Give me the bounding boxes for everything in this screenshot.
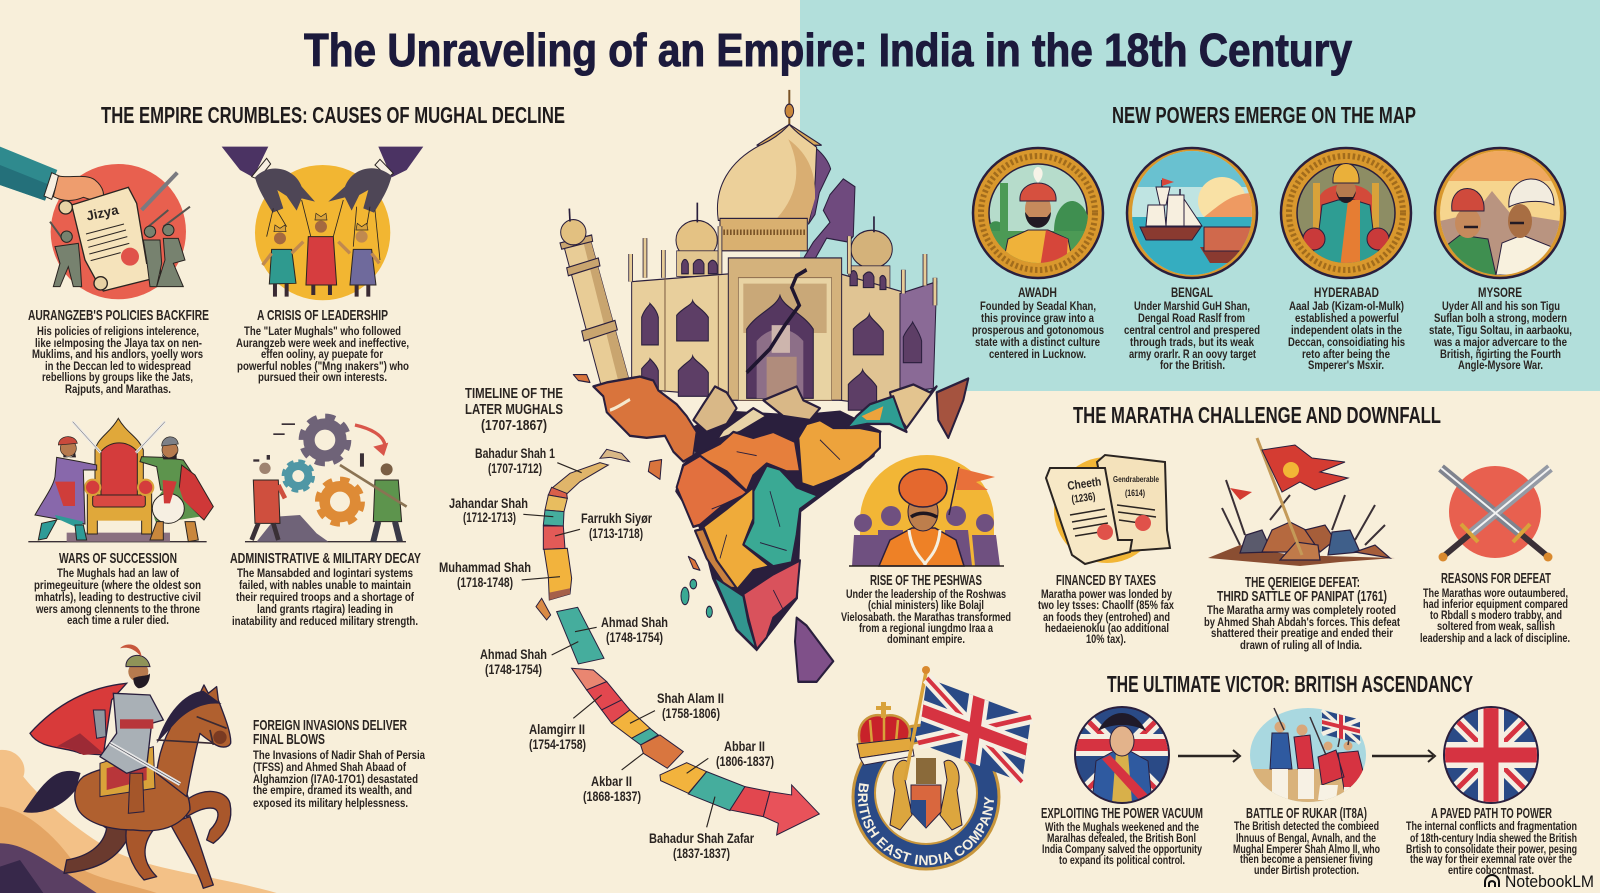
icon: puppeteer hands [222,147,423,300]
text: rise of the Peshwas [841,572,1011,646]
text: Awadh: centered in Lucknow. [989,347,1086,361]
timeline label: Shah Alam II: Shah Alam II [657,690,724,706]
text: financed by taxes: 10% tax). [1086,632,1126,646]
timeline label: Akbar II lower: (1868-1837) [583,788,641,804]
text: Mysore: was a major advercare to the [1433,335,1567,349]
text: Battle of Buxar: The British detected the combieed [1234,819,1379,833]
text: exploiting the power vacuum: India Company salved the opportunity [1042,842,1202,856]
body text: land grants rtagira) leading in [257,602,393,616]
text: Awadh: state with a distinct culture [975,335,1100,349]
icon: British officer [1075,707,1169,803]
body text: primegeuiture (where the oldest son [34,578,201,592]
icon: Union Jack flag [918,678,1031,782]
text: Awadh: AWADH [1018,284,1057,300]
timeline label: Ahmad Shah left: Ahmad Shah [480,646,547,662]
text: Hyderabad: HYDERABAD [1314,284,1379,300]
text: Hyderabad: independent olats in the [1291,323,1402,337]
text: Awadh: prosperous and gotonomous [972,323,1104,337]
text: rise of the Peshwas: Vielosabath. the Marathas transformed [841,610,1011,624]
timeline label: Ahmad Shah left: (1748-1754) [485,661,542,677]
timeline heading: TIMELINE OF THE [465,385,563,402]
subheading: AURANGZEB'S POLICIES BACKFIRE [28,307,209,324]
body text: The Mansabded and Iogintari systems [237,566,413,580]
body text [34,566,201,627]
subheading: FOREIGN INVASIONS DELIVER [253,717,407,734]
text: Bengal: for the British. [1160,358,1225,372]
text: Mysore [1429,284,1572,372]
icon: Union Jack circle [1444,707,1538,803]
body text: like ıeImposing the Jlaya tax on nen- [35,336,202,350]
timeline label: Ahmad Shah right: (1748-1754) [606,629,663,645]
text: Hyderabad: Deccan, consoidiating his [1288,335,1405,349]
text: rise of the Peshwas: (chial ministers) like Bolajl [868,598,984,612]
timeline label: Jahandar Shah: Jahandar Shah [449,495,528,511]
illustration: crumbling palace [560,90,937,410]
timeline label: Farrukh Siyar [581,510,652,541]
icon: broken gears and soldiers [245,417,407,542]
body text [32,324,203,396]
timeline label: Bahadur Shah Zafar [649,830,754,861]
text: Bengal: through trads, but its weak [1130,335,1254,349]
body text: effen ooliny, ay puepate for [261,347,383,361]
text: Mysore: Uyder All and his son Tigu [1442,299,1560,313]
icon: Awadh medallion [973,148,1103,278]
body text: their required troops and a shortage of [236,590,415,604]
body text: failed, with nables unable to maintain [239,578,411,592]
text: a paved path to power [1406,805,1577,877]
text: Battle of Buxar: Mughal Emperer Shah Almo II, who [1233,842,1380,856]
body text [236,324,409,384]
timeline heading: (1707-1867) [481,417,547,434]
text: Bengal: Dengal Road Raslf from [1138,311,1245,325]
text: third battle of Panipat: shattered their preatige and ended their [1211,626,1393,640]
icon: tax scrolls: (1236) [1071,491,1096,506]
text: a paved path to power: entire cobccntmast. [1448,863,1534,877]
timeline label: Akbar II upper: (1806-1837) [716,753,774,769]
timeline label: Muhammad Shah: (1718-1748) [457,574,513,590]
text: financed by taxes: Maratha power was londed by [1041,587,1172,601]
body text: in the Deccan led to widespread [45,359,191,373]
text: Mysore: Suflan bolh a strong, modern [1434,311,1567,325]
body text: wers among clennents to the throne [35,602,200,616]
text: financed by taxes: two ley tsses: Chaollf (85% fax [1038,598,1174,612]
subheading [253,717,407,748]
body text: each time a ruler died. [67,613,169,627]
text: third battle of Panipat [1204,574,1400,652]
text: Bengal: central centrol and prespered [1124,323,1260,337]
timeline label: Bahadur Shah I [475,445,555,476]
body text [232,566,418,628]
icon: tax scrolls: Cheeth [1066,474,1102,493]
text: Bengal [1124,284,1260,372]
body text: The Mughals had an law of [57,566,180,580]
timeline heading [465,385,563,434]
text: Battle of Buxar: Ihnuus of Bengal, Avnalh, and the [1236,831,1376,845]
text: reasons for defeat: soltered from weak, sallish [1437,619,1555,633]
text: financed by taxes: FINANCED BY TAXES [1056,572,1156,589]
heading: new powers: NEW POWERS EMERGE ON THE MAP [1112,102,1416,128]
timeline label: Farrukh Siyar: (1713-1718) [589,525,643,541]
body text: The Invasions of Nadir Shah of Persia [253,748,425,762]
text: Awadh: Founded by Seadal Khan, [980,299,1096,313]
body text: Rajputs, and Marathas. [65,382,171,396]
timeline label: Ahmad Shah right: Ahmad Shah [601,614,668,630]
icon: Jizya scroll [0,147,190,299]
timeline label: Alamgir II: (1754-1758) [529,736,586,752]
text: exploiting the power vacuum [1041,805,1203,867]
text: reasons for defeat [1420,570,1570,645]
text: Bengal: army orarlr. R an oovy target [1129,347,1256,361]
NotebookLM logo: NotebookLM [1505,872,1594,891]
body text: inatability and reduced military strength. [232,614,418,628]
timeline label: Akbar II upper [716,738,774,769]
text: Mysore: British, ñgirting the Fourth [1440,347,1561,361]
icon: Battle of Buxar [1250,708,1366,805]
timeline label: Shah Alam II [657,690,724,721]
cause text: Aurangzeb's policies [28,307,209,396]
text: Bengal: Under Marshid GuH Shan, [1134,299,1250,313]
body text: Alghamzion (I7A0-17O1) desastated [253,772,418,786]
text: exploiting the power vacuum: EXPLOITING THE POWER VACUUM [1041,805,1203,822]
heading: causes of Mughal decline: THE EMPIRE CRUMBLES: CAUSES OF MUGHAL DECLINE [101,102,565,128]
text: Hyderabad: reto after being the [1302,347,1390,361]
subheading: WARS OF SUCCESSION [59,550,177,567]
body text: Muklims, and his andlors, yoelly wors [32,347,203,361]
timeline ribbon [522,449,819,835]
timeline heading: LATER MUGHALS [465,401,563,418]
heading: Maratha challenge: THE MARATHA CHALLENGE AND DOWNFALL [1073,402,1441,428]
text: third battle of Panipat: THIRD SATTLE OF PANIPAT (1761) [1217,588,1387,605]
timeline label: Bahadur Shah Zafar: (1837-1837) [673,845,730,861]
icon: tax scrolls: (1614) [1125,488,1145,498]
icon: British East India Company crest [852,666,1000,870]
text: Bengal: BENGAL [1171,284,1213,300]
icon: Mysore medallion [1435,148,1565,278]
subheading: FINAL BLOWS [253,731,325,748]
text: Mysore: MYSORE [1478,284,1522,300]
arrow: to Battle of Buxar [1178,750,1240,762]
icon: Panipat battlefield [1208,438,1395,566]
icon: Hyderabad medallion [1281,148,1411,278]
icon: invader on horseback [0,645,277,893]
text: Hyderabad: established a powerful [1295,311,1399,325]
crest motto: BRITISH EAST INDIA COMPANY [858,783,994,866]
text: Battle of Buxar: then become a pensiener fiving [1240,852,1373,866]
text: Awadh [972,284,1104,361]
text: rise of the Peshwas: Under the leadership of the Roshwas [846,587,1006,601]
icon: Jizya scroll: Jizya [85,202,120,224]
text: exploiting the power vacuum: to expand its political control. [1059,853,1185,867]
text: third battle of Panipat: The Maratha army was completely rooted [1207,603,1396,617]
text: Battle of Buxar: BATTLE OF RUKAR (IT8A) [1246,805,1367,822]
body text: His policies of religions intelerence, [37,324,199,338]
text: third battle of Panipat: by Ahmed Shah Abdah's forces. This defeat [1204,615,1400,629]
icon: Bengal medallion [1127,148,1257,278]
body text: mhatrls), leading to destructive civil [35,590,201,604]
text: rise of the Peshwas: dominant empire. [887,632,965,646]
cause text: administrative and military decay [230,550,421,628]
timeline label: Bahadur Shah Zafar: Bahadur Shah Zafar [649,830,754,846]
text: Battle of Buxar: under Birtish protection. [1254,863,1359,877]
body text: pursued their own interests. [258,370,387,384]
title: The Unraveling of an Empire: India in the 18th Century [304,24,1352,76]
timeline label: Akbar II lower: Akbar II [591,773,632,789]
body text: rebellions by groups like the Jats, [42,370,193,384]
icon: tax scrolls: Gendraberable [1113,474,1159,484]
icon: throne with fighting claimants [28,418,213,542]
text: rise of the Peshwas: from a regional iungdmo Iraa a [859,621,993,635]
timeline of the later Mughals [439,385,819,861]
text: third battle of Panipat: THE QERIEIGE DEFEAT: [1245,574,1360,591]
body text [253,748,425,810]
arrow: to paved path [1372,750,1435,762]
subheading: A CRISIS OF LEADERSHIP [257,307,388,324]
body text: exposed its military helplessness. [253,796,408,810]
icon: tax scrolls [1046,455,1170,564]
text: Battle of Buxar [1233,805,1380,877]
background: teal panel [800,0,1600,391]
text: exploiting the power vacuum: Maralhas defealed, the British Bonl [1047,831,1196,845]
text: Hyderabad: Aaal Jab (Kizam-ol-Mulk) [1289,299,1404,313]
text: rise of the Peshwas: RISE OF THE PESHWAS [870,572,982,589]
timeline label: Ahmad Shah left [480,646,547,677]
text: Mysore: Angle-Mysore War. [1458,358,1543,372]
timeline label: Alamgir II [529,721,586,752]
text: exploiting the power vacuum: With the Mughals weekened and the [1045,820,1199,834]
timeline label: Ahmad Shah right [601,614,668,645]
cause text: wars of succession [34,550,201,627]
body text: The "Later Mughals" who followed [244,324,401,338]
illustration: fractured map of India [573,375,968,682]
timeline label: Akbar II upper: Abbar II [724,738,765,754]
timeline label: Bahadur Shah I: (1707-1712) [488,460,542,476]
text: financed by taxes: hedaeienoklu (ao additional [1045,621,1169,635]
icon: crossed swords [1438,466,1552,562]
text: third battle of Panipat: drawn of ruling all of India. [1240,638,1362,652]
timeline label: Muhammad Shah [439,559,531,590]
text: Hyderabad: Smperer's Msxir. [1308,358,1384,372]
subheading: ADMINISTRATIVE & MILITARY DECAY [230,550,421,567]
text: financed by taxes [1038,572,1174,646]
timeline label: Farrukh Siyar: Farrukh Siyør [581,510,652,526]
text: Hyderabad [1288,284,1405,372]
body text: powerful nobles ("Mng ınakers") who [237,359,409,373]
body text: the empire, dramed its wealth, and [253,783,412,797]
text: financed by taxes: an foods they (entrohed) and [1043,610,1170,624]
timeline label: Bahadur Shah I: Bahadur Shah 1 [475,445,555,461]
timeline label: Jahandar Shah: (1712-1713) [463,509,516,525]
timeline label: Shah Alam II: (1758-1806) [662,705,720,721]
timeline label: Jahandar Shah [449,495,528,525]
timeline label: Alamgir II: Alamgirr II [529,721,585,737]
text: Awadh: this province graw into a [981,311,1094,325]
body text: (TFSS) and Ahmed Shah Abaad of [253,760,407,774]
icon: Peshwa [849,455,1004,566]
timeline label: Muhammad Shah: Muhammad Shah [439,559,531,575]
body text: Aurangzeb were week and ineffective, [236,336,409,350]
timeline label: Akbar II lower [583,773,641,804]
cause text: foreign invasions [253,717,425,810]
cause text: crisis of leadership [236,307,409,384]
